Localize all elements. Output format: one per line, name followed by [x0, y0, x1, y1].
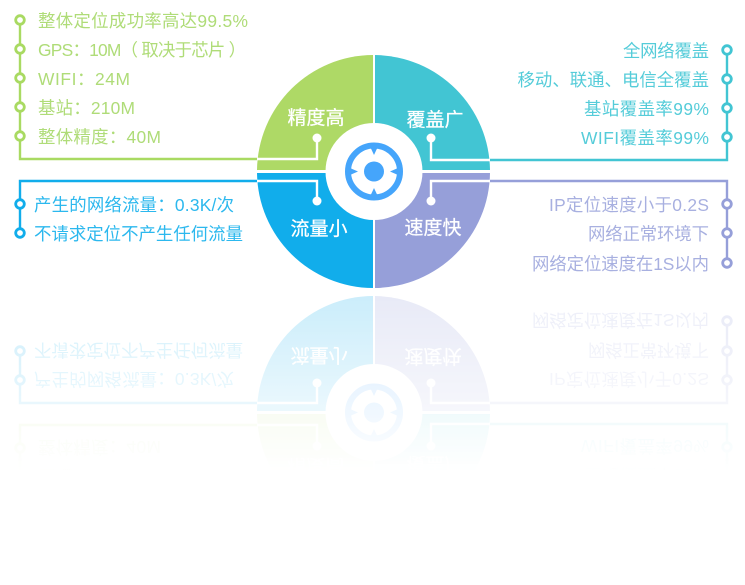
- text block: coverage list: [518, 41, 709, 148]
- reflection of the whole diagram: 全网络覆盖: [623, 523, 709, 543]
- list markers: accuracy: [16, 16, 24, 140]
- reflection of the whole diagram: 整体定位成功率高达99.5%: [38, 553, 248, 573]
- reflection of the whole diagram: 网络定位速度在1S以内: [532, 310, 709, 330]
- quadrant: traffic: [257, 173, 373, 288]
- reflection of the whole diagram: GPS：10M（ 取决于芯片 ）: [38, 524, 246, 544]
- connector: speed: [426, 181, 727, 263]
- quadrant: coverage: [375, 55, 490, 170]
- connector: traffic: [20, 181, 322, 233]
- reflection of the whole diagram: [14, 296, 732, 438]
- connector: coverage: [426, 50, 727, 160]
- reflection of the whole diagram: 基站覆盖率99%: [584, 465, 709, 485]
- text block: accuracy list: GPS：10M（ 取决于芯片 ）: [38, 40, 246, 60]
- reflection of the whole diagram: 速度快: [404, 345, 462, 367]
- icon: location target: [348, 146, 400, 198]
- quadrant labels: 速度快: [404, 217, 462, 239]
- text block: speed list: 网络正常环境下: [588, 224, 709, 244]
- quadrant labels: 流量小: [290, 218, 348, 240]
- reflection of the whole diagram: 精度高: [287, 455, 345, 477]
- reflection of the whole diagram: WIFI：24M: [38, 495, 130, 515]
- text block: traffic list: 不请求定位不产生任何流量: [34, 224, 243, 244]
- reflection of the whole diagram: IP定位速度小于0.2S: [549, 369, 709, 389]
- list markers: coverage: [723, 46, 731, 141]
- text block: accuracy list: 整体精度：40M: [38, 127, 161, 147]
- center disc: [326, 123, 422, 220]
- text block: accuracy list: 基站：210M: [38, 98, 135, 118]
- reflection of the whole diagram: 产生的网络流量：0.3K/次: [34, 369, 234, 389]
- list markers: speed: [723, 200, 731, 267]
- panel: central circle: [257, 55, 490, 288]
- text block: coverage list: 移动、联通、电信全覆盖: [518, 70, 709, 90]
- text block: coverage list: 全网络覆盖: [623, 41, 709, 61]
- text block: coverage list: 基站覆盖率99%: [584, 99, 709, 119]
- text block: speed list: [532, 195, 709, 274]
- reflection of the whole diagram: 覆盖广: [406, 453, 464, 475]
- text block: traffic list: 产生的网络流量：0.3K/次: [34, 195, 234, 215]
- quadrant: accuracy: [257, 55, 373, 170]
- reflection of the whole diagram: WIFI覆盖率99%: [581, 436, 709, 456]
- reflection of the whole diagram: 移动、联通、电信全覆盖: [518, 494, 709, 514]
- list markers: traffic: [16, 200, 24, 237]
- text block: traffic list: [34, 195, 243, 244]
- reflection of the whole diagram: 不请求定位不产生任何流量: [34, 340, 243, 360]
- reflection of the whole diagram: 流量小: [290, 344, 348, 366]
- reflection of the whole diagram: 网络正常环境下: [588, 340, 709, 360]
- quadrant labels: [287, 107, 464, 240]
- reflection of the whole diagram: 整体精度：40M: [38, 437, 161, 457]
- text block: speed list: IP定位速度小于0.2S: [549, 195, 709, 215]
- quadrant: speed: [375, 173, 490, 288]
- text block: coverage list: WIFI覆盖率99%: [581, 128, 709, 148]
- quadrant labels: 精度高: [287, 107, 345, 129]
- text block: accuracy list: 整体定位成功率高达99.5%: [38, 11, 248, 31]
- connector: accuracy: [20, 20, 322, 159]
- text block: accuracy list: WIFI：24M: [38, 69, 130, 89]
- reflection of the whole diagram: 基站：210M: [38, 466, 135, 486]
- quadrant labels: 覆盖广: [406, 109, 464, 131]
- text block: speed list: 网络定位速度在1S以内: [532, 254, 709, 274]
- text block: accuracy list: [38, 11, 248, 147]
